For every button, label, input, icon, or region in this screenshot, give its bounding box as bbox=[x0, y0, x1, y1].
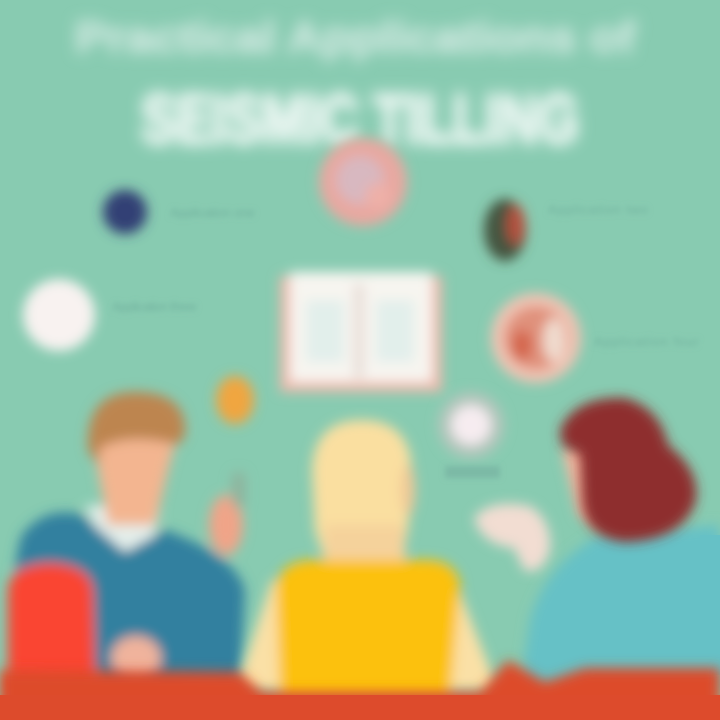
title bbox=[75, 13, 635, 158]
label: striped badge: Application two bbox=[548, 202, 648, 217]
table bbox=[0, 660, 720, 720]
person: left man bbox=[8, 392, 245, 700]
face bbox=[562, 440, 600, 530]
icon: navy dot bbox=[103, 190, 147, 234]
hand bbox=[474, 504, 550, 571]
finger bbox=[232, 472, 245, 508]
icon: right pink badge bbox=[491, 293, 581, 383]
hair bbox=[560, 398, 696, 542]
title: SEISMIC TILLING bbox=[141, 80, 579, 158]
arms bbox=[236, 580, 498, 690]
open book panel bbox=[280, 272, 442, 392]
arm hand on table bbox=[111, 636, 161, 680]
teal top bbox=[520, 525, 720, 690]
icon: white circle bbox=[23, 279, 95, 351]
head bbox=[312, 420, 412, 560]
sweater bbox=[14, 512, 245, 690]
neck and collar bbox=[85, 505, 160, 552]
icon: striped badge bbox=[484, 199, 526, 261]
label: small white badge bbox=[445, 466, 500, 478]
red chair bbox=[8, 563, 96, 700]
icon: orange dot bbox=[216, 376, 254, 424]
label: right pink badge: Application four bbox=[594, 334, 700, 349]
hair bbox=[88, 392, 185, 465]
teal right edge bbox=[700, 535, 720, 675]
icon: top centre badge bbox=[319, 138, 407, 226]
yellow sweater bbox=[276, 560, 460, 700]
ear shade bbox=[401, 464, 415, 516]
person: right woman bbox=[474, 398, 720, 690]
label: navy dot: Application one bbox=[170, 205, 255, 220]
icon: small white badge bbox=[438, 392, 504, 458]
raised hand bbox=[209, 495, 243, 555]
person: centre figure bbox=[236, 420, 498, 700]
face bbox=[92, 425, 180, 525]
label: white circle: Application three bbox=[112, 299, 197, 314]
title: Practical Applications of bbox=[75, 13, 635, 62]
neck bbox=[325, 525, 405, 570]
